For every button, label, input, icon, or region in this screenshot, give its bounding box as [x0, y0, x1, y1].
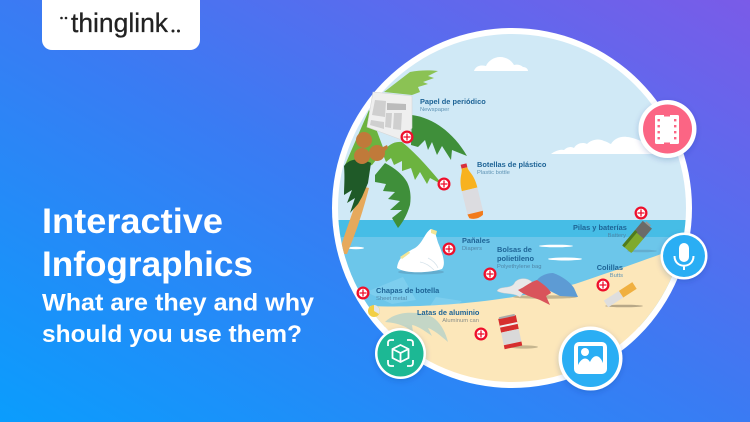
label: polyethylene bag: polietileno	[497, 254, 534, 263]
image button	[558, 326, 622, 390]
subtitle	[42, 290, 314, 348]
label: newspaper: Newspaper	[420, 107, 449, 113]
label: sheet metal: Chapas de botella	[376, 286, 440, 295]
label: butts: Butts	[610, 273, 623, 279]
title: Infographics	[42, 245, 253, 284]
palm shadow	[385, 313, 448, 342]
subtitle: should you use them?	[42, 321, 302, 348]
label: plastic bottle: Plastic bottle	[477, 170, 510, 176]
hotspot markers	[356, 130, 648, 340]
label: aluminium can: Latas de aluminio	[417, 308, 480, 317]
battery	[622, 219, 657, 253]
label: diapers: Diapers	[462, 246, 482, 252]
circular beach illustration	[330, 28, 700, 400]
wave highlights	[348, 245, 582, 260]
3D button	[375, 328, 426, 379]
label: polyethylene bag	[497, 245, 541, 270]
video button	[638, 100, 696, 158]
clouds	[474, 57, 667, 154]
icon: picture	[574, 342, 607, 374]
palm tree	[339, 70, 467, 254]
label: batteries	[573, 223, 627, 239]
subtitle: What are they and why	[42, 290, 314, 316]
label: polyethylene bag: Polyethylene bag	[497, 264, 541, 270]
plastic bottle	[456, 162, 484, 220]
diapers	[397, 229, 444, 274]
plastic bags	[497, 273, 578, 305]
sky	[330, 30, 700, 222]
icon: AR cube	[388, 340, 413, 366]
label: diapers: Pañales	[462, 236, 490, 245]
label: batteries: Battery	[608, 233, 626, 239]
icon: microphone	[674, 243, 694, 270]
logo card	[42, 0, 200, 50]
label: aluminium can	[417, 308, 480, 324]
hotspot labels	[376, 97, 627, 324]
cigarette butt	[604, 282, 643, 307]
label: sheet metal	[376, 286, 440, 302]
trunk	[339, 186, 369, 254]
bottle cap	[368, 305, 380, 317]
label: polyethylene bag: Bolsas de	[497, 245, 532, 254]
title	[42, 202, 314, 348]
label: newspaper: Papel de periódico	[420, 97, 486, 106]
icon: film strip	[655, 115, 679, 144]
logo wordmark: thinglink	[71, 8, 168, 38]
fronds	[384, 70, 438, 95]
label: newspaper	[420, 97, 486, 113]
newspaper	[367, 92, 412, 140]
audio button	[660, 232, 708, 280]
label: diapers	[462, 236, 490, 252]
label: sheet metal: Sheet metal	[376, 296, 407, 302]
sun reflections	[366, 277, 462, 306]
coconuts	[354, 132, 388, 164]
aluminium can	[498, 314, 538, 349]
sand	[370, 254, 672, 382]
label: plastic bottle	[477, 160, 547, 176]
title: Interactive	[42, 202, 223, 241]
label: aluminium can: Aluminum can	[442, 318, 479, 324]
label: plastic bottle: Botellas de plástico	[477, 160, 547, 169]
label: batteries: Pilas y baterías	[573, 223, 627, 232]
label: butts	[597, 263, 623, 279]
sea	[330, 220, 700, 238]
label: butts: Colillas	[597, 263, 623, 272]
